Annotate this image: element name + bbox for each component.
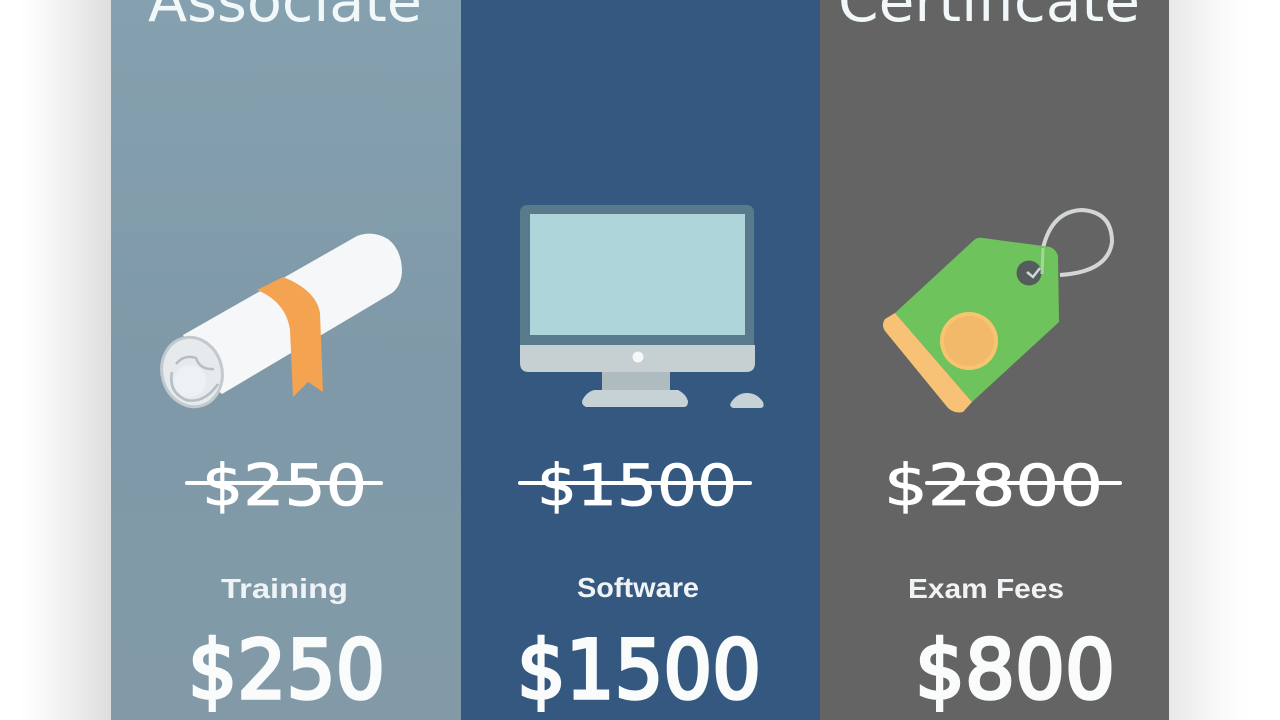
icon: price tag	[883, 210, 1112, 412]
label: Software: Software	[577, 572, 699, 603]
label: Training: Training	[221, 573, 348, 604]
price: $800: $800	[915, 624, 1115, 718]
struck price: $250: $250	[202, 453, 367, 519]
panel: Certificate	[820, 0, 1169, 720]
panel: middle	[461, 0, 820, 720]
price: $250: $250	[188, 624, 385, 718]
struck price: $1500: $1500	[537, 453, 737, 519]
struck price: $2800: $2800	[884, 453, 1103, 519]
icon: diploma scroll	[154, 234, 402, 414]
label: Exam Fees: Exam Fees	[908, 573, 1064, 604]
icon: desktop computer	[520, 205, 764, 408]
price: $1500: $1500	[517, 624, 761, 718]
panel: Associate	[111, 0, 461, 720]
